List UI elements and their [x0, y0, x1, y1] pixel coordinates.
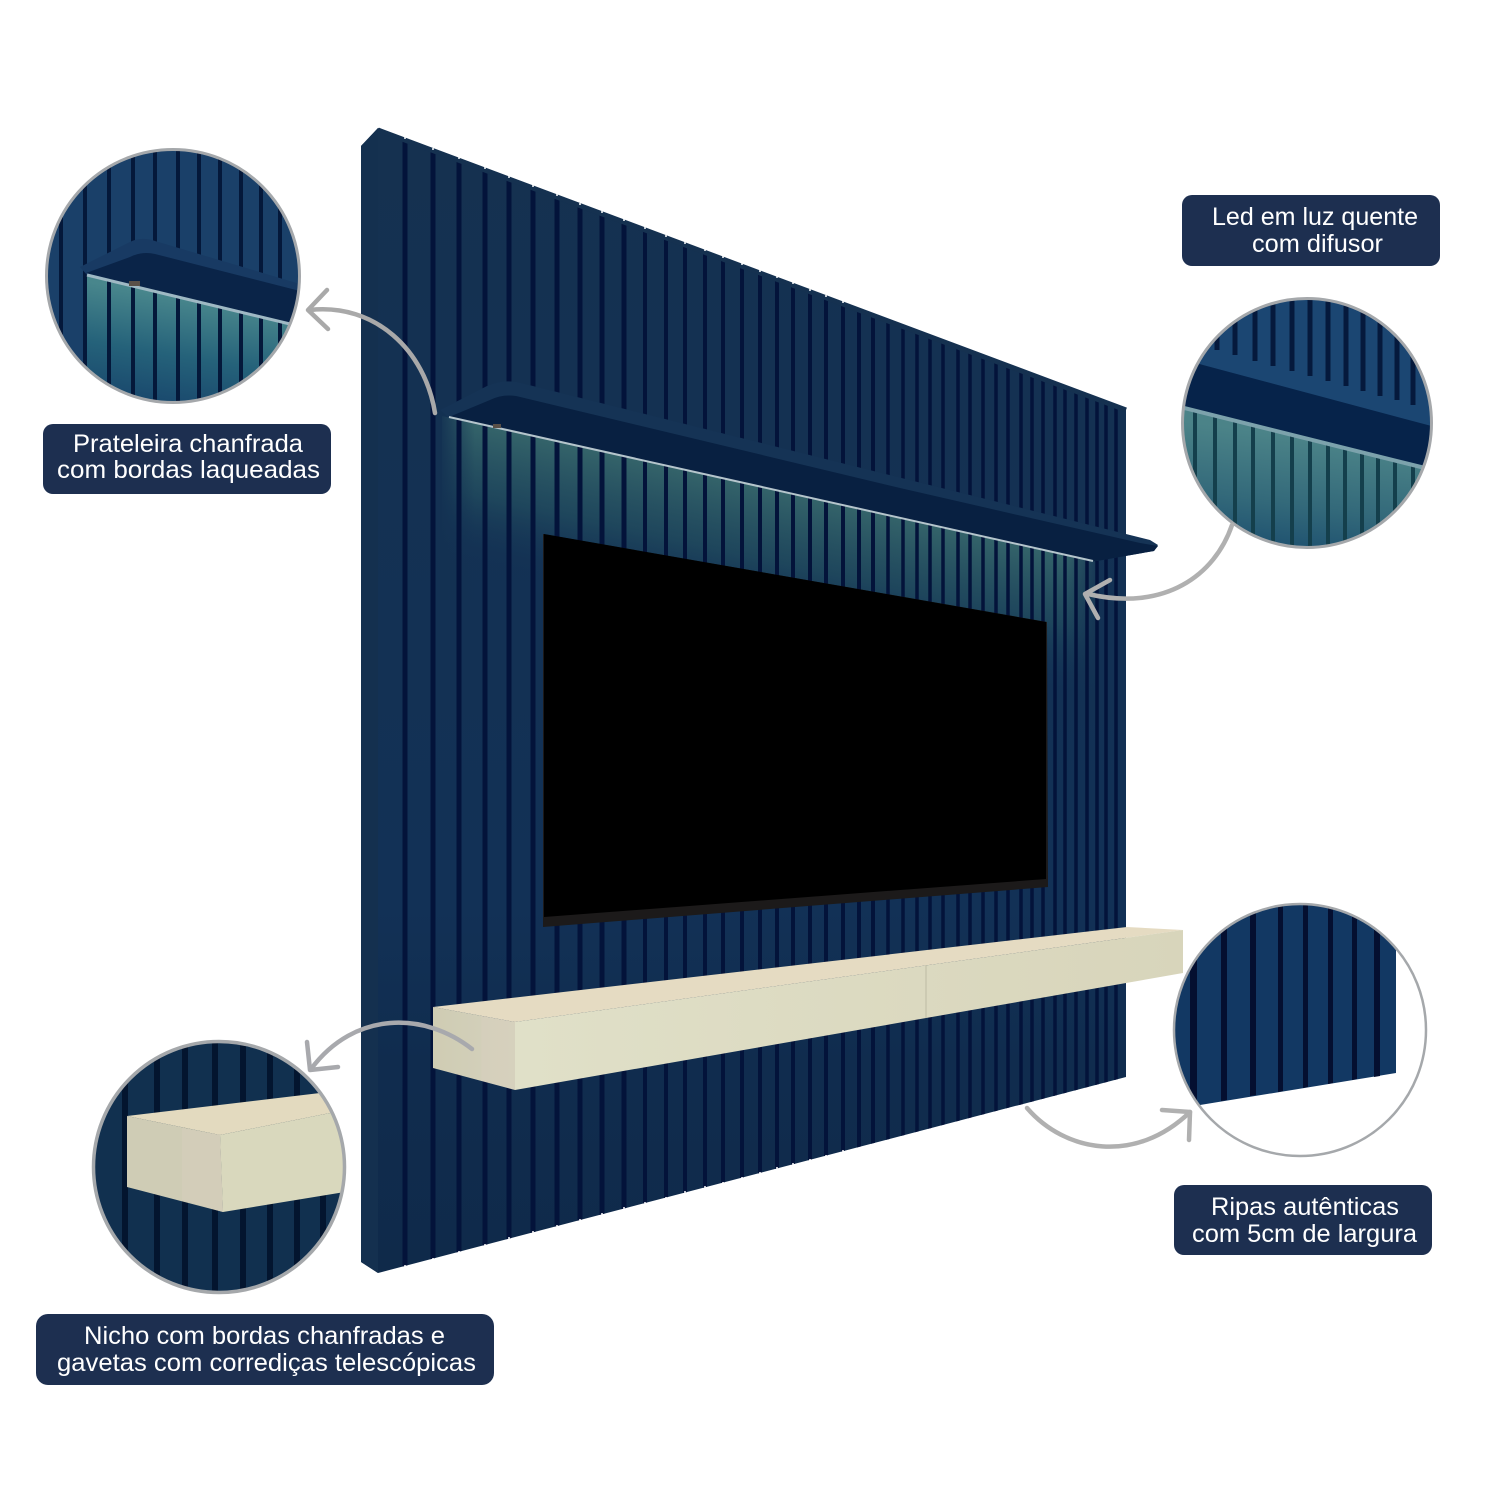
LED strip — [449, 417, 1093, 561]
label: slats — [1174, 1185, 1432, 1255]
circle: LED detail — [1181, 297, 1433, 549]
label: LED: Led em luz quente — [1212, 203, 1418, 231]
arrow: shelf — [308, 290, 435, 413]
floating shelf — [440, 381, 1158, 561]
label: niche: Nicho com bordas chanfradas e — [84, 1322, 445, 1350]
circle: niche detail — [93, 1040, 345, 1295]
label: niche: gavetas com corrediças telescópicas — [57, 1349, 476, 1377]
arrow: LED — [1085, 525, 1232, 618]
cream drawer niche — [433, 927, 1183, 1090]
slat gaps — [405, 130, 1116, 1300]
label: shelf: com bordas laqueadas — [57, 456, 320, 484]
side face of panel — [361, 128, 378, 1273]
top edge cap — [378, 130, 1126, 410]
label: niche — [36, 1314, 494, 1385]
LED glow on slats — [440, 410, 1100, 710]
label: slats: Ripas autênticas — [1211, 1193, 1399, 1221]
arrow: slats — [1027, 1108, 1190, 1147]
label: slats: com 5cm de largura — [1192, 1220, 1417, 1248]
slat end notches — [405, 137, 843, 303]
label: LED: com difusor — [1252, 230, 1383, 258]
circle: shelf detail — [45, 148, 301, 404]
circle: slats detail — [1170, 900, 1426, 1156]
slatted wall panel — [361, 128, 1126, 1300]
label: shelf: Prateleira chanfrada — [73, 430, 303, 458]
arrow: niche — [307, 1023, 472, 1070]
label: LED — [1182, 195, 1440, 266]
shelf bracket — [493, 424, 501, 428]
television — [543, 534, 1048, 927]
label: shelf — [43, 424, 331, 494]
